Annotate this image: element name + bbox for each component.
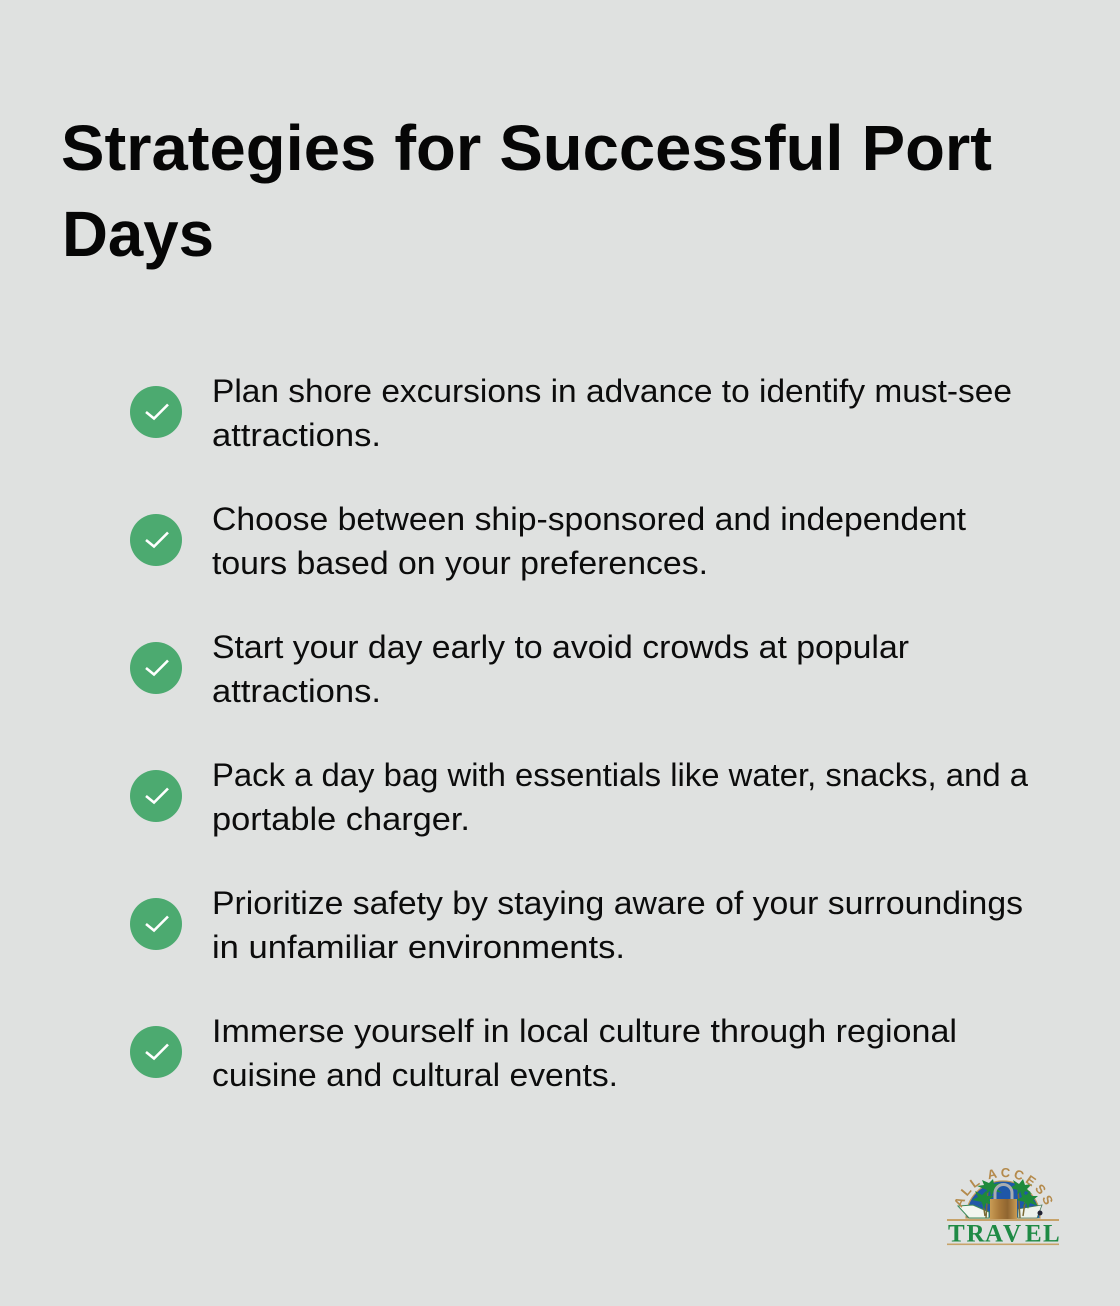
text 2 <box>212 501 966 581</box>
text 1 <box>212 373 1012 453</box>
icon: check 5 <box>130 898 182 950</box>
text 5: in unfamiliar environments. <box>212 929 625 965</box>
icon: check 3 <box>130 642 182 694</box>
checklist item 5 <box>130 885 1023 965</box>
text 4: Pack a day bag with essentials like water, snacks, and a <box>212 757 1029 793</box>
logo boats <box>958 1205 1042 1218</box>
icon: check 2 <box>130 514 182 566</box>
text 5: Prioritize safety by staying aware of your surroundings <box>212 885 1023 921</box>
text 6: Immerse yourself in local culture through regional <box>212 1013 957 1049</box>
logo wordmark: TRAVEL <box>948 1220 1060 1248</box>
text 1: Plan shore excursions in advance to identify must-see <box>212 373 1012 409</box>
logo dome <box>966 1181 1040 1218</box>
checklist item 3 <box>130 629 909 709</box>
title <box>61 112 992 270</box>
text 4: portable charger. <box>212 801 470 837</box>
text 3: attractions. <box>212 673 381 709</box>
title: Strategies for Successful Port <box>61 112 992 184</box>
text 3 <box>212 629 909 709</box>
checklist item 6 <box>130 1013 957 1093</box>
text 6 <box>212 1013 957 1093</box>
logo rules <box>947 1219 1059 1245</box>
text 2: tours based on your preferences. <box>212 545 708 581</box>
icon: check 4 <box>130 770 182 822</box>
checklist item 2 <box>130 501 966 581</box>
logo palms <box>972 1179 1038 1218</box>
text 1: attractions. <box>212 417 381 453</box>
logo padlock <box>990 1184 1017 1219</box>
text 5 <box>212 885 1023 965</box>
text 2: Choose between ship-sponsored and independent <box>212 501 966 537</box>
icon: check 6 <box>130 1026 182 1078</box>
title: Days <box>62 198 214 270</box>
logo: All Access Travel <box>947 1168 1060 1248</box>
logo arc text: ALL ACCESS <box>955 1168 1052 1208</box>
icon: check 1 <box>130 386 182 438</box>
text 3: Start your day early to avoid crowds at popular <box>212 629 909 665</box>
checklist item 1 <box>130 373 1012 453</box>
text 4 <box>212 757 1029 837</box>
text 6: cuisine and cultural events. <box>212 1057 618 1093</box>
checklist item 4 <box>130 757 1029 837</box>
